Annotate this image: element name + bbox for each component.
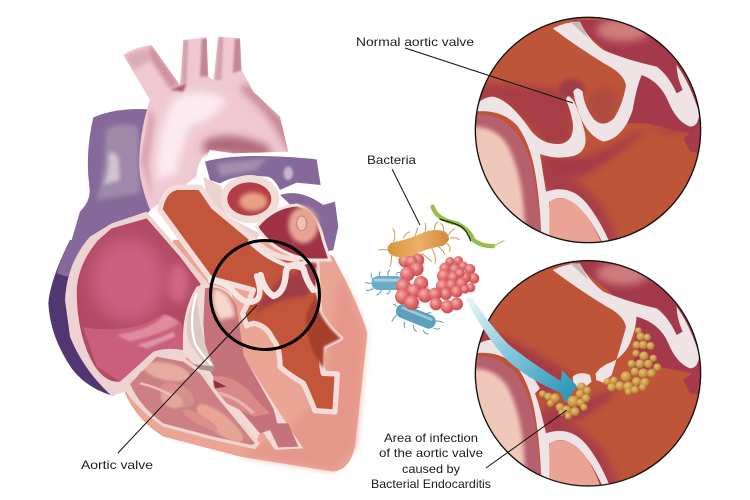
- right ventricle folds: [126, 353, 260, 449]
- red coccus cluster: [395, 253, 479, 313]
- outer purple wall: [48, 240, 140, 396]
- aorta: [123, 37, 293, 210]
- label: normal aortic valve with leader: [356, 35, 573, 103]
- vegetation: upper bacterial cluster: [604, 327, 661, 395]
- pale wall between pulmonary ring and aorta: [203, 177, 260, 247]
- label: aortic valve with leader: Aortic valve: [81, 458, 153, 472]
- left atrium: [257, 205, 330, 260]
- heart illustration: [48, 37, 367, 472]
- pocket: sinus right: [549, 440, 600, 486]
- label: infection area with leader: [371, 410, 567, 491]
- label: infection area with leader: Bacterial Endocarditis: [371, 477, 491, 491]
- pocket: sinus right: [547, 198, 602, 243]
- green bacterium: [433, 207, 504, 246]
- lens: normal aortic valve: [474, 16, 702, 244]
- damaged white band and remnant right: [553, 263, 699, 383]
- label: aortic valve with leader: [81, 305, 257, 472]
- label: infection area with leader: caused by: [402, 462, 460, 476]
- orange bacterium: [378, 222, 459, 268]
- left ventricle cavity with folds: [183, 284, 303, 450]
- pocket: sinus left: [476, 114, 542, 232]
- white valve: right leaflet and top band: [553, 22, 699, 142]
- magnifier circle on heart: [210, 240, 320, 350]
- vegetation: lower bacterial cluster: [539, 382, 591, 420]
- damaged valve remnant: [572, 373, 592, 388]
- label: bacteria with leader: Bacteria: [367, 153, 416, 167]
- white valve: left leaflet and wall: [473, 96, 610, 243]
- aortic valve in heart: [211, 240, 327, 302]
- label: infection area with leader: Area of infection: [384, 431, 478, 445]
- pulmonary valve ring: [221, 175, 279, 223]
- damaged white wall left: [473, 340, 610, 487]
- heart muscle body: [125, 240, 367, 472]
- pulmonary artery: [205, 156, 338, 253]
- lens: infected aortic valve: [474, 260, 702, 487]
- pocket: sinus left: [476, 356, 542, 475]
- label: infection area with leader: of the aortic valve: [379, 446, 483, 460]
- ascending aorta and left ventricle outflow (red): [160, 187, 341, 412]
- vena cava: [63, 109, 153, 268]
- label: normal aortic valve with leader: Normal aortic valve: [356, 35, 474, 49]
- bacteria illustration: [365, 207, 504, 334]
- label: bacteria with leader: [367, 153, 420, 225]
- blue bacteria: [365, 270, 443, 334]
- right atrium: [65, 212, 208, 396]
- arrow: infection pathway: [465, 298, 577, 403]
